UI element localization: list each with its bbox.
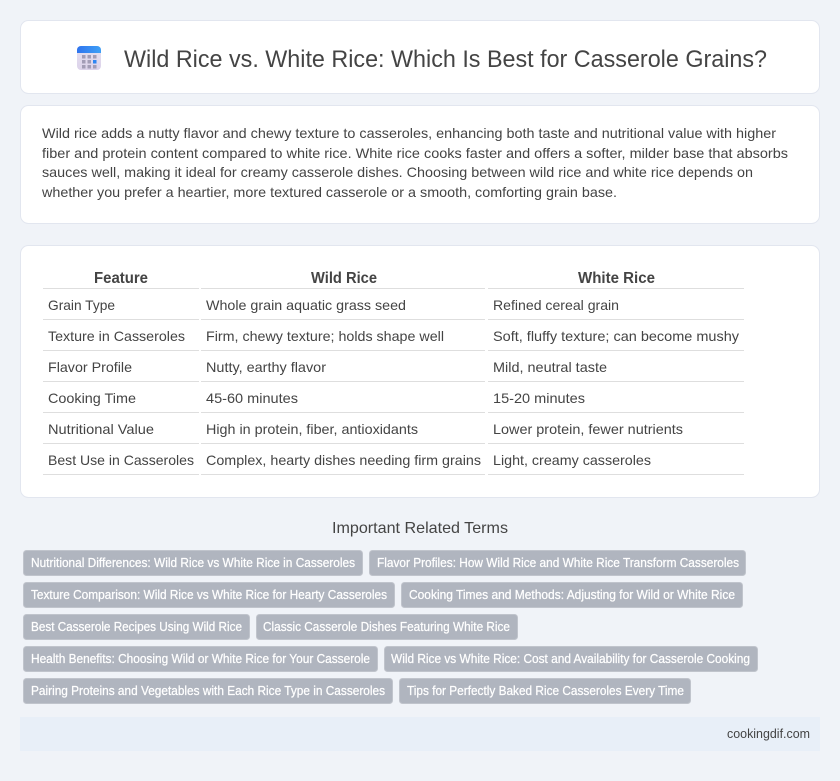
tag: Wild Rice vs White Rice: Cost and Availability for Casserole Cooking	[391, 652, 750, 666]
row: texture: Texture in Casseroles	[48, 328, 185, 344]
row: cooking time: 45-60 minutes	[206, 390, 298, 406]
panel: comparison table	[20, 246, 820, 498]
tag	[384, 646, 758, 672]
tag	[256, 614, 518, 640]
row: best use	[48, 452, 651, 468]
tag: Classic Casserole Dishes Featuring White Rice	[263, 620, 510, 634]
table header row	[94, 270, 655, 287]
table header row: Feature	[94, 270, 148, 287]
panel: introduction	[20, 106, 820, 224]
heading: related terms: Important Related Terms	[332, 520, 508, 537]
tag	[402, 582, 742, 608]
row: best use: Light, creamy casseroles	[493, 452, 651, 468]
icon: calendar	[77, 46, 101, 70]
tag: Nutritional Differences: Wild Rice vs White Rice in Casseroles	[31, 556, 355, 570]
intro paragraph: fiber and protein content compared to white rice. White rice cooks faster and offers a softer, milder base that absorbs	[42, 145, 788, 161]
row: grain type	[48, 297, 619, 313]
row: flavor: Nutty, earthy flavor	[206, 359, 326, 375]
intro paragraph: Wild rice adds a nutty flavor and chewy texture to casseroles, enhancing both taste and nutritional value with higher	[42, 125, 776, 141]
tag: Health Benefits: Choosing Wild or White Rice for Your Casserole	[31, 652, 370, 666]
tag	[24, 550, 362, 576]
row: best use: Complex, hearty dishes needing firm grains	[206, 452, 481, 468]
row: flavor: Mild, neutral taste	[493, 359, 607, 375]
title: Wild Rice vs. White Rice: Which Is Best for Casserole Grains?	[124, 46, 767, 73]
row: best use: Best Use in Casseroles	[48, 452, 194, 468]
table header row: White Rice	[578, 270, 655, 287]
tag: Texture Comparison: Wild Rice vs White Rice for Hearty Casseroles	[31, 588, 387, 602]
tag: Tips for Perfectly Baked Rice Casseroles Every Time	[407, 684, 684, 698]
tag	[24, 582, 394, 608]
row: nutrition	[48, 421, 683, 437]
row: nutrition: High in protein, fiber, antioxidants	[206, 421, 418, 437]
tag	[24, 646, 378, 672]
tag: Flavor Profiles: How Wild Rice and White Rice Transform Casseroles	[377, 556, 739, 570]
related term tags	[24, 550, 758, 704]
tag: Pairing Proteins and Vegetables with Each Rice Type in Casseroles	[31, 684, 385, 698]
tag	[24, 614, 250, 640]
row: nutrition: Lower protein, fewer nutrients	[493, 421, 683, 437]
footer bar	[20, 717, 820, 751]
tag: Best Casserole Recipes Using Wild Rice	[31, 620, 242, 634]
row: grain type: Grain Type	[48, 297, 115, 313]
row: grain type: Refined cereal grain	[493, 297, 619, 313]
intro paragraph	[41, 125, 788, 200]
row: cooking time: Cooking Time	[48, 390, 136, 406]
row: grain type: Whole grain aquatic grass seed	[206, 297, 406, 313]
row: texture	[48, 328, 739, 344]
row: texture: Firm, chewy texture; holds shape well	[206, 328, 444, 344]
tag	[24, 678, 392, 704]
tag	[370, 550, 746, 576]
tag	[400, 678, 690, 704]
row: flavor: Flavor Profile	[48, 359, 132, 375]
tag: Cooking Times and Methods: Adjusting for Wild or White Rice	[409, 588, 735, 602]
table header row: Wild Rice	[311, 270, 377, 287]
row: cooking time: 15-20 minutes	[493, 390, 585, 406]
row: flavor	[48, 359, 607, 375]
intro paragraph: sauces well, making it ideal for creamy casserole dishes. Choosing between wild rice and white rice depends on	[42, 164, 753, 180]
row: nutrition: Nutritional Value	[48, 421, 154, 437]
intro paragraph: whether you prefer a heartier, more textured casserole or a smooth, comforting grain base.	[41, 184, 617, 200]
row: cooking time	[48, 390, 585, 406]
row: texture: Soft, fluffy texture; can become mushy	[493, 328, 739, 344]
panel: header	[20, 20, 820, 94]
footer source: cookingdif.com	[727, 727, 810, 741]
